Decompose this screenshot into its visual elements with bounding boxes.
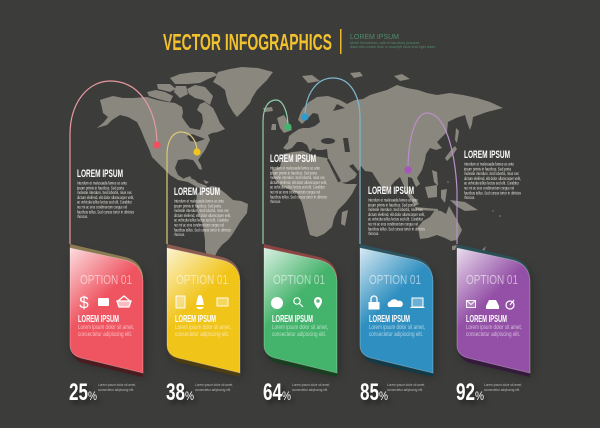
text block 1: rhoncus. — [77, 214, 88, 219]
text block 5 — [464, 149, 521, 200]
text block 4: molestie interdum. Sed lobortis, risus nec — [368, 207, 424, 212]
connector 2 — [167, 132, 201, 244]
card 5: purple: Lorem ipsum dolor sit amet, — [466, 325, 522, 331]
text block 2: molestie interdum. Sed lobortis, risus nec — [174, 208, 230, 213]
text block 1: dictum eleifend, elit dolor ullamcorper velit, — [77, 195, 134, 200]
icon: document — [176, 296, 185, 308]
card 4: blue: Lorem ipsum dolor sit amet, — [369, 325, 425, 331]
text block 5: ac vehicula tellus lectus sed elit. Curabitur — [464, 181, 519, 186]
connector 3 — [263, 100, 292, 244]
text block 4: ac vehicula tellus lectus sed elit. Curabitur — [368, 217, 423, 222]
stat: 25%: 25 — [69, 379, 88, 406]
stat: 25%: Lorem ipsum dolor sit amet, — [98, 383, 136, 387]
card 5: purple: OPTION 01 — [466, 273, 518, 287]
text block 2: LOREM IPSUM — [174, 186, 220, 198]
connector 1 — [70, 81, 161, 244]
text block 3: ac vehicula tellus lectus sed elit. Curabitur — [270, 185, 325, 190]
text block 4: rhoncus. — [368, 231, 379, 236]
text block 1: ac vehicula tellus lectus sed elit. Curabitur — [77, 200, 132, 205]
card 3: green: LOREM IPSUM — [272, 313, 313, 325]
text block 1: molestie interdum. Sed lobortis, risus nec — [77, 190, 133, 195]
stat: 25% — [69, 379, 136, 406]
text block 1 — [77, 168, 134, 219]
subtitle: LOREM IPSUM — [350, 32, 399, 41]
card 2: yellow — [167, 244, 240, 377]
stat: 38%: consectetur adipiscing elit. — [195, 388, 231, 392]
map inland seas — [187, 104, 359, 182]
stat: 38% — [166, 379, 233, 406]
text block 1: faucibus tellus. Sed cursus tortor in ultricies — [77, 209, 134, 214]
text block 2: nec mi ac eros condimentum congue vel — [174, 222, 224, 228]
text block 2: Interdum et malesuada fames ac ante — [174, 198, 224, 204]
card 4: blue — [360, 244, 433, 377]
card 4: blue: OPTION 01 — [369, 273, 421, 287]
text block 3: Interdum et malesuada fames ac ante — [270, 166, 320, 170]
card 1: red: Lorem ipsum dolor sit amet, — [78, 325, 134, 331]
stat: 64%: consectetur adipiscing elit. — [292, 388, 328, 392]
card 1: red: LOREM IPSUM — [78, 313, 119, 325]
card 5: purple — [457, 244, 530, 377]
icon: lock — [368, 296, 380, 310]
text block 1: nec mi ac eros condimentum congue vel — [77, 204, 127, 210]
stat: 64% — [263, 379, 330, 406]
icon: globe box — [271, 297, 283, 309]
text block 5: Interdum et malesuada fames ac ante — [464, 162, 514, 166]
stat: 92%: consectetur adipiscing elit. — [484, 388, 520, 392]
subtitle: Morbi fermentum, odio id faucibus posuere, — [350, 41, 420, 45]
card 1: red: OPTION 01 — [80, 273, 132, 287]
card 1: red: consectetur adipiscing elit. — [78, 332, 132, 338]
text block 3: nec mi ac eros condimentum congue vel — [270, 190, 320, 194]
icon: gauge — [506, 300, 514, 309]
world map — [97, 67, 503, 258]
text block 4: dictum eleifend, elit dolor ullamcorper velit, — [368, 212, 425, 217]
icon: mail — [217, 298, 228, 306]
card 3: green: Lorem ipsum dolor sit amet, — [272, 325, 328, 331]
text block 1: Interdum et malesuada fames ac ante — [77, 180, 127, 186]
card 5: purple: LOREM IPSUM — [466, 313, 507, 325]
stat: 92%: Lorem ipsum dolor sit amet, — [484, 383, 522, 387]
stat: 25%: % — [88, 389, 97, 403]
text block 2: dictum eleifend, elit dolor ullamcorper velit, — [174, 213, 231, 218]
text block 4: faucibus tellus. Sed cursus tortor in ultricies — [368, 226, 425, 231]
stat: 85% — [360, 379, 425, 406]
text block 5: LOREM IPSUM — [464, 149, 510, 161]
text block 3: faucibus tellus. Sed cursus tortor in ultricies — [270, 194, 327, 199]
card 4: blue: consectetur adipiscing elit. — [369, 332, 423, 338]
text block 5: nec mi ac eros condimentum congue vel — [464, 186, 514, 190]
text block 2 — [174, 186, 231, 237]
title: VECTOR INFOGRAPHICS — [163, 29, 332, 55]
stat: 64%: Lorem ipsum dolor sit amet, — [292, 383, 330, 387]
stat: 85%: 85 — [360, 379, 379, 406]
card 5: purple: consectetur adipiscing elit. — [466, 332, 520, 338]
stat: 92%: 92 — [456, 379, 475, 406]
stat: 38%: % — [185, 389, 194, 403]
text block 1: ipsum primis in faucibus. Sed porta — [77, 185, 124, 190]
stat: 92% — [456, 379, 522, 406]
icon: envelope — [466, 300, 476, 308]
card 2: yellow: OPTION 01 — [176, 273, 228, 287]
text block 4: LOREM IPSUM — [368, 185, 414, 197]
icon: cloud — [388, 299, 403, 307]
text block 3 — [270, 153, 327, 204]
icon: dollar: $ — [79, 293, 89, 312]
icon: basket — [117, 296, 131, 307]
icon: hard drive — [486, 300, 499, 309]
title separator — [340, 29, 342, 54]
text block 3: LOREM IPSUM — [270, 153, 316, 165]
text block 3: dictum eleifend, elit dolor ullamcorper velit, — [270, 180, 327, 185]
text block 4: nec mi ac eros condimentum congue vel — [368, 222, 418, 226]
subtitle — [350, 32, 436, 49]
text block 4: ipsum primis in faucibus. Sed porta — [368, 202, 415, 207]
text block 3: rhoncus. — [270, 199, 281, 204]
text block 2: faucibus tellus. Sed cursus tortor in ultricies — [174, 227, 231, 232]
subtitle: diam nisl ornare erat, in suscipit risus erat eget diam. — [350, 45, 436, 49]
card 2: yellow: LOREM IPSUM — [175, 313, 216, 325]
text block 5: molestie interdum. Sed lobortis, risus nec — [464, 171, 520, 176]
text block 3: molestie interdum. Sed lobortis, risus nec — [270, 175, 326, 180]
connector 4 — [301, 78, 360, 244]
icon: wallet — [98, 298, 109, 306]
card 2: yellow: Lorem ipsum dolor sit amet, — [175, 325, 231, 331]
text block 1: LOREM IPSUM — [77, 168, 123, 180]
text block 4: Interdum et malesuada fames ac ante — [368, 198, 418, 202]
text block 2: ac vehicula tellus lectus sed elit. Curabitur — [174, 218, 229, 223]
text block 2: rhoncus. — [174, 232, 185, 237]
stat: 85%: % — [379, 389, 388, 403]
icon: location pin — [314, 297, 322, 309]
stat: 64%: % — [282, 389, 291, 403]
icon: search — [294, 298, 303, 307]
stat: 85%: consectetur adipiscing elit. — [387, 388, 423, 392]
card 4: blue: LOREM IPSUM — [369, 313, 410, 325]
card 3: green — [264, 244, 337, 377]
text block 5: faucibus tellus. Sed cursus tortor in ultricies — [464, 190, 521, 195]
connector 5 — [404, 113, 457, 244]
card 2: yellow: consectetur adipiscing elit. — [175, 332, 229, 338]
stat: 38%: 38 — [166, 379, 185, 406]
text block 5: dictum eleifend, elit dolor ullamcorper velit, — [464, 176, 521, 181]
card 1: red — [70, 244, 143, 377]
card 3: green: consectetur adipiscing elit. — [272, 332, 326, 338]
text block 5: ipsum primis in faucibus. Sed porta — [464, 166, 511, 171]
stat: 92%: % — [475, 389, 484, 403]
stat: 38%: Lorem ipsum dolor sit amet, — [195, 383, 233, 387]
text block 5: rhoncus. — [464, 195, 475, 200]
stat: 64%: 64 — [263, 379, 282, 406]
stat: 25%: consectetur adipiscing elit. — [98, 388, 134, 392]
text block 3: ipsum primis in faucibus. Sed porta — [270, 170, 317, 175]
stat: 85%: Lorem ipsum dolor sit amet, — [387, 383, 425, 387]
text block 2: ipsum primis in faucibus. Sed porta — [174, 203, 221, 208]
icon: bell — [196, 295, 204, 309]
text block 4 — [368, 185, 425, 236]
icon: drive box — [410, 298, 424, 308]
card 3: green: OPTION 01 — [273, 273, 325, 287]
